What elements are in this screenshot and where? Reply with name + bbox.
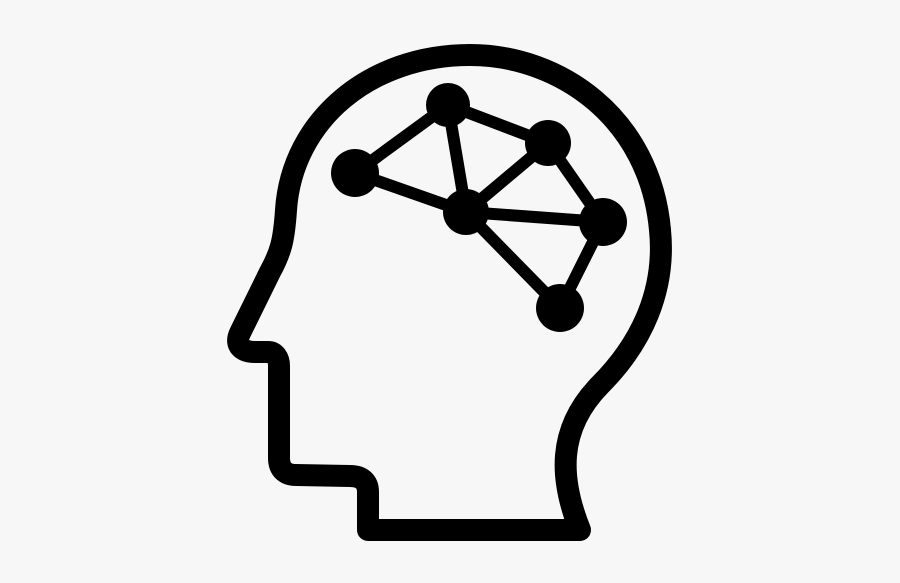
brain network [331, 83, 627, 332]
network edges [355, 105, 603, 308]
head outline [238, 55, 661, 530]
network nodes [331, 83, 627, 332]
